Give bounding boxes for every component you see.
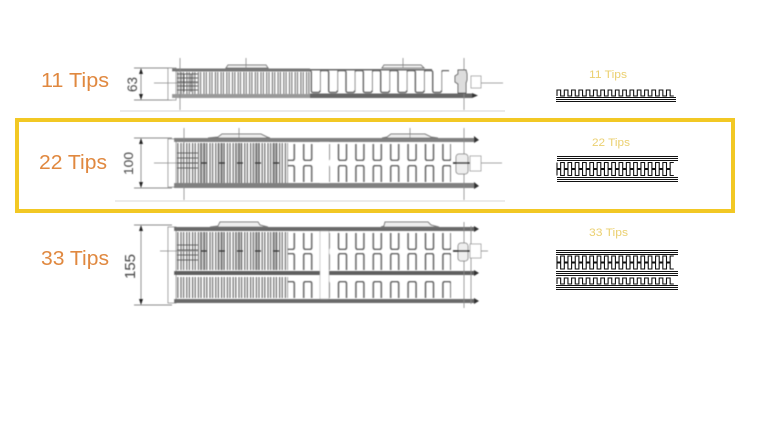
small label: 22 Tips: 22 Tips xyxy=(592,137,631,149)
valve connector xyxy=(453,154,502,174)
radiator body xyxy=(160,222,479,308)
separator line xyxy=(120,110,505,112)
technical drawing: 22 Tips radiator xyxy=(121,128,502,200)
radiator body xyxy=(154,58,478,110)
heading: 33 Tips: 33 Tips xyxy=(41,248,109,270)
valve connector xyxy=(453,243,488,261)
dimension: 155: 155 xyxy=(122,254,139,279)
highlight frame: 22 Tips row xyxy=(17,120,733,211)
small label: 33 Tips: 33 Tips xyxy=(589,227,629,239)
dimension: 100 xyxy=(121,138,172,188)
heading: 11 Tips: 11 Tips xyxy=(41,70,109,92)
dimension: 100: 100 xyxy=(121,152,136,175)
radiator body xyxy=(154,128,479,200)
heading: 22 Tips: 22 Tips xyxy=(39,152,107,174)
technical drawing: 11 Tips radiator xyxy=(124,58,503,110)
dimension: 63 xyxy=(124,68,172,100)
cross-section: 11 Tips xyxy=(556,90,676,102)
dimension: 63: 63 xyxy=(124,77,140,92)
separator line xyxy=(115,200,505,202)
valve connector xyxy=(455,70,503,93)
cross-section: 33 Tips xyxy=(556,250,678,290)
small label: 11 Tips: 11 Tips xyxy=(589,69,628,81)
technical drawing: 33 Tips radiator xyxy=(122,222,488,308)
cross-section: 22 Tips xyxy=(557,156,678,182)
dimension: 155 xyxy=(122,225,172,305)
